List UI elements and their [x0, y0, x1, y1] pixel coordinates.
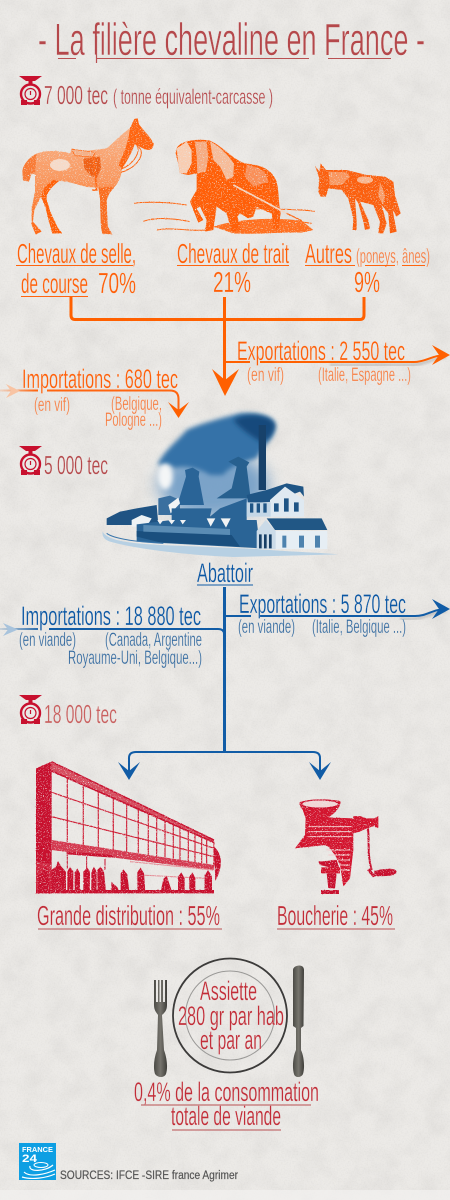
consumption note [134, 1077, 319, 1131]
orange import flow: (Belgique, [111, 394, 162, 415]
logo: France 24: FRANCE [22, 1145, 53, 1154]
sources: SOURCES: IFCE -SIRE france Agrimer [60, 1170, 238, 1182]
blue flow: split to retail [118, 587, 331, 780]
export notes: (en vif) [247, 365, 284, 386]
plate text: Assiette [200, 976, 257, 1006]
icon: kitchen scale [19, 446, 42, 475]
label: supermarket share: Grande distribution : 55% [37, 900, 220, 931]
blue flow: import arrow [0, 601, 224, 669]
consumption note: totale de viande [171, 1101, 281, 1131]
tonnage text: 7 000 tec [44, 80, 108, 110]
illustration: saddle horse [22, 118, 154, 234]
import notes: (en viande) [19, 630, 76, 651]
tonnage text: 5 000 tec [44, 450, 108, 480]
illustration: plate and cutlery: et par an [200, 1025, 262, 1055]
label: draft horses [177, 238, 289, 299]
label: draft horses: Chevaux de trait [177, 238, 289, 269]
orange import flow: Pologne ...) [105, 410, 162, 431]
orange flow: merge arrow [71, 297, 364, 396]
illustration: plate and cutlery: 280 gr par hab [178, 1001, 284, 1031]
blue flow: import arrow: (Canada, Argentine [105, 630, 202, 651]
icon: kitchen scale [19, 76, 42, 105]
consumption note: 0,4% de la consommation [134, 1077, 319, 1107]
illustration: supermarket hall [36, 762, 221, 893]
label: saddle and racing horses [16, 238, 136, 300]
scale figure: 7 000 tec [19, 76, 273, 110]
import heading: Importations : 18 880 tec [21, 601, 201, 631]
export notes: (en viande) [238, 617, 295, 638]
icon: plate [173, 958, 287, 1072]
icon: kitchen scale [19, 695, 42, 724]
icon: knife [293, 965, 304, 1077]
scale figure: 18 000 tec [19, 695, 117, 729]
blue flow: export arrow [226, 589, 450, 638]
import heading: Importations : 680 tec [22, 364, 178, 394]
logo: France 24 [19, 1143, 56, 1180]
orange export flow [226, 336, 450, 386]
blue flow: import arrow: Royaume-Uni, Belgique...) [68, 648, 202, 669]
label: saddle and racing horses: 70% [98, 268, 136, 300]
label: other equines: 9% [354, 267, 380, 299]
unit note: ( tonne équivalent-carcasse ) [113, 86, 273, 109]
label: saddle and racing horses: de course [21, 268, 88, 299]
illustration: plate and cutlery [154, 958, 304, 1077]
scale figure: 5 000 tec [19, 446, 108, 480]
label: butcher share [277, 900, 395, 931]
label: other equines [305, 238, 430, 299]
illustration: slaughterhouse factory [102, 413, 338, 557]
label: abattoir: Abattoir [197, 558, 253, 588]
illustration: draft horses [134, 140, 315, 234]
illustration: donkey [315, 163, 401, 233]
orange import flow [0, 364, 189, 431]
logo: France 24: 24 [22, 1153, 38, 1165]
label: draft horses: 21% [213, 267, 251, 299]
label: abattoir [197, 558, 253, 588]
orange category labels [16, 238, 430, 300]
import notes: (en vif) [34, 395, 70, 416]
icon: fork [154, 980, 167, 1077]
label: other equines: Autres [305, 238, 352, 269]
tonnage text: 18 000 tec [44, 699, 117, 729]
illustration: meat grinder [295, 799, 397, 894]
label: saddle and racing horses: Chevaux de selle, [17, 238, 136, 269]
